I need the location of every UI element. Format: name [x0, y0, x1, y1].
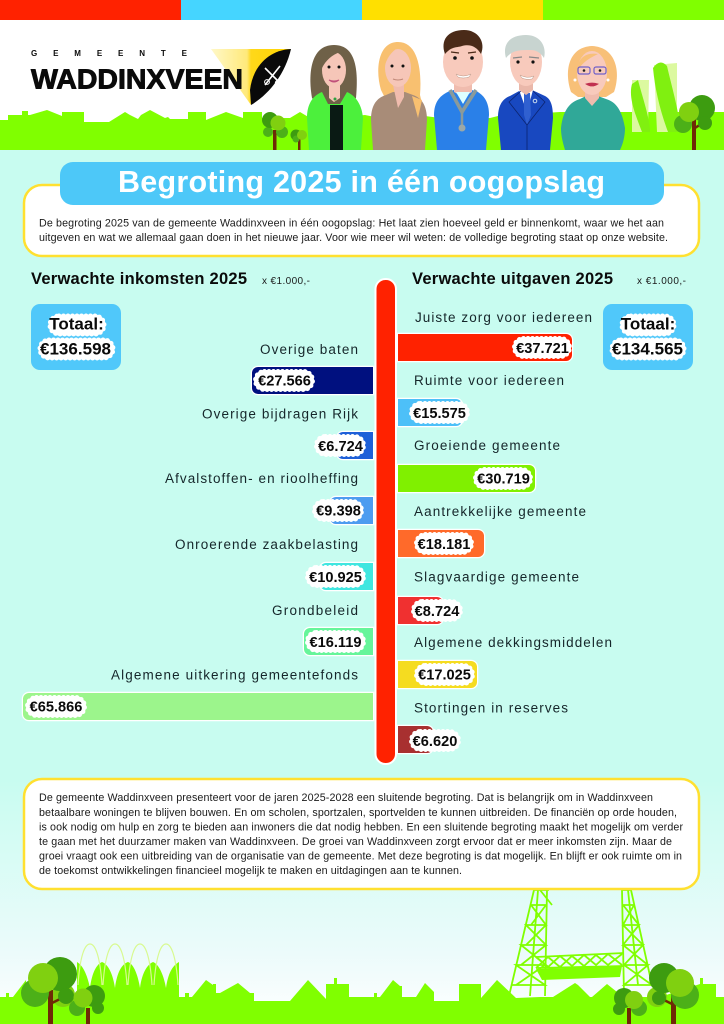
body text: De gemeente Waddinxveen presenteert voor de jaren 2025-2028 een sluitende begroting. Dat is belangrijk om in Waddinxveen	[39, 792, 653, 804]
expenses total box: €134.565	[612, 340, 683, 358]
row: Overige baten: Overige baten	[260, 342, 358, 357]
row: Afvalstoffen- en rioolheffing: Afvalstoffen- en rioolheffing	[165, 471, 358, 486]
panel: expenses	[398, 270, 693, 753]
row: Algemene dekkingsmiddelen: Algemene dekkingsmiddelen	[414, 635, 612, 650]
row: Aantrekkelijke gemeente: Aantrekkelijke gemeente	[414, 504, 586, 519]
intro text: De begroting 2025 van de gemeente Waddinxveen in één oogopslag: Het laat zien hoeveel geld er binnenkomt, waar we het aan	[39, 218, 664, 230]
header skyline	[0, 110, 724, 150]
row: Afvalstoffen- en rioolheffing: €9.398	[316, 504, 361, 520]
person: man in blue suit	[498, 35, 553, 150]
row: Algemene dekkingsmiddelen	[398, 635, 612, 688]
title: Begroting 2025 in één oogopslag	[118, 165, 605, 199]
unit note expenses: x €1.000,-	[637, 276, 686, 287]
row: Juiste zorg voor iedereen	[398, 310, 592, 361]
row: Afvalstoffen- en rioolheffing	[165, 471, 373, 524]
person: woman in green jacket	[307, 45, 363, 150]
row: Stortingen in reserves	[398, 700, 568, 753]
body text: is ook nodig om hulp en zorg te bieden aan inwoners die dat nodig hebben. En een sluitende begroting maakt het mogelijk om verder	[39, 822, 683, 834]
row: Overige baten: €27.566	[258, 374, 311, 390]
row: Ruimte voor iedereen: Ruimte voor iedereen	[414, 373, 564, 388]
unit note income: x €1.000,-	[262, 276, 310, 287]
row: Algemene uitkering gemeentefonds: Algemene uitkering gemeentefonds	[111, 668, 358, 682]
row: Overige bijdragen Rijk: Overige bijdragen Rijk	[202, 406, 358, 422]
expenses total box	[603, 304, 693, 370]
row: Algemene uitkering gemeentefonds: €65.866	[30, 700, 82, 716]
row: Ruimte voor iedereen: €15.575	[413, 406, 466, 422]
row: Slagvaardige gemeente: Slagvaardige gemeente	[414, 570, 579, 584]
person: mayor with chain	[434, 30, 489, 150]
income total box	[31, 304, 121, 370]
income total box: Totaal:	[49, 314, 104, 334]
panel: header illustration	[0, 30, 724, 150]
row: Aantrekkelijke gemeente: €18.181	[418, 537, 470, 553]
row: Slagvaardige gemeente: €8.724	[415, 604, 460, 620]
heading: expenses: Verwachte uitgaven 2025	[412, 270, 613, 288]
income total box: €136.598	[40, 340, 111, 358]
row: Algemene dekkingsmiddelen: €17.025	[418, 668, 471, 684]
heading: income: Verwachte inkomsten 2025	[31, 270, 247, 288]
row: Aantrekkelijke gemeente	[398, 504, 586, 557]
row: Groeiende gemeente: Groeiende gemeente	[414, 438, 560, 453]
icon: trees bottom right	[613, 963, 699, 1024]
row: Stortingen in reserves: Stortingen in reserves	[414, 700, 568, 716]
expenses total box: Totaal:	[621, 314, 675, 334]
row: Overige bijdragen Rijk	[202, 406, 373, 459]
icon: small trees header	[262, 112, 307, 150]
row: Slagvaardige gemeente	[398, 570, 579, 624]
row: Overige baten	[252, 342, 373, 394]
logo: GEMEENTE	[31, 49, 188, 58]
intro text: uitgeven en wat we allemaal gaan doen in het nieuwe jaar. Voor wie meer wil weten: de volledige begroting staat op onze website.	[39, 232, 668, 244]
row: Juiste zorg voor iedereen: Juiste zorg voor iedereen	[415, 310, 592, 325]
panel: bottom text box	[24, 779, 699, 889]
top colour band	[0, 0, 724, 20]
intro box	[24, 185, 699, 256]
bottom skyline	[0, 944, 724, 1024]
row: Stortingen in reserves: €6.620	[413, 734, 457, 750]
body text	[39, 792, 683, 877]
row: Grondbeleid: €16.119	[310, 635, 361, 651]
central red axis bar	[376, 279, 396, 764]
row: Onroerende zaakbelasting	[175, 537, 373, 590]
title pill	[60, 162, 664, 205]
row: Grondbeleid	[272, 603, 373, 655]
logo	[31, 49, 291, 105]
row: Ruimte voor iedereen	[398, 373, 564, 426]
panel: income	[23, 270, 373, 720]
row: Grondbeleid: Grondbeleid	[272, 603, 358, 618]
intro text	[39, 218, 668, 244]
row: Onroerende zaakbelasting: Onroerende zaakbelasting	[175, 537, 358, 552]
body text: te gaan met het duurzamer maken van Waddinxveen. De groei van Waddinxveen zorgt ervoor dat er meer inkomsten zijn. Maar de	[39, 836, 672, 848]
row: Groeiende gemeente: €30.719	[477, 472, 530, 488]
body text: de toekomst ontwikkelingen financieel mogelijk te maken en uitdagingen aan te kunnen.	[39, 865, 462, 877]
body text: betaalbare woningen te blijven bouwen. En om scholen, sportzalen, sportvelden te kunnen uitbreiden. De financiën op orde houden,	[39, 807, 677, 819]
person: blonde woman in taupe top	[371, 42, 427, 150]
body text: groei vraagt ook een uitbreiding van de organisatie van de gemeente. Met deze begroting is dat mogelijk. En blijft er ook ruimte om in	[39, 850, 682, 862]
person: woman with glasses	[561, 46, 625, 150]
icon: towers	[631, 62, 680, 132]
row: Onroerende zaakbelasting: €10.925	[309, 570, 362, 586]
row: Juiste zorg voor iedereen: €37.721	[516, 341, 569, 357]
row: Groeiende gemeente	[398, 438, 560, 492]
row: Overige bijdragen Rijk: €6.724	[318, 439, 364, 455]
icon: bridge	[509, 890, 652, 996]
logo: WADDINXVEEN	[31, 64, 243, 94]
icon: trees bottom left	[21, 957, 105, 1024]
panel: intro	[24, 162, 699, 256]
icon: tree right	[674, 95, 715, 150]
row: Algemene uitkering gemeentefonds	[23, 668, 373, 720]
